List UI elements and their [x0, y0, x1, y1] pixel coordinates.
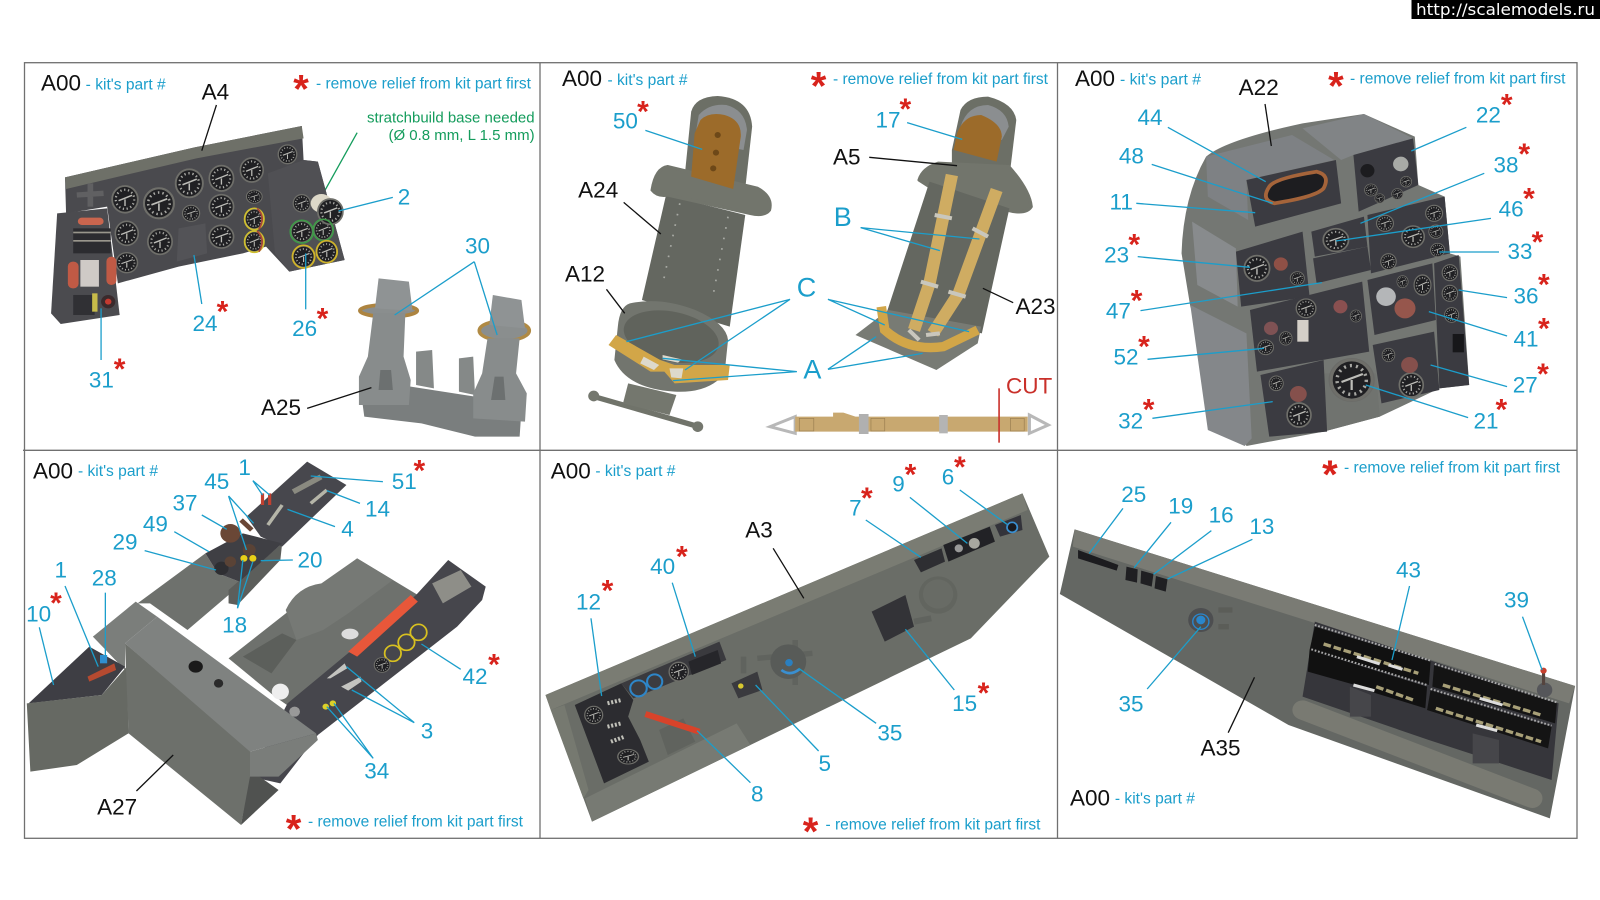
callout: A35: [1200, 677, 1254, 761]
heading: kit's part legend: A00: [1075, 66, 1115, 91]
callout: A: A: [803, 354, 821, 384]
heading: kit's part legend: [551, 458, 676, 483]
legend: remove relief note: [811, 65, 1049, 109]
callout: 34: [327, 703, 389, 784]
callout: 31: 31: [89, 367, 114, 392]
callout: 1 top: 1: [238, 455, 251, 480]
note: stretch build base: stratchbuild base needed: [367, 109, 535, 126]
callout: 15: *: [978, 677, 990, 710]
callout: 52: *: [1138, 330, 1150, 363]
callout: B: [834, 202, 979, 251]
callout: 13: 13: [1249, 514, 1274, 539]
callout: 2: 2: [398, 184, 410, 209]
callout: 29: [112, 529, 216, 570]
callout: 6: [942, 451, 1007, 524]
callout: 40: [650, 540, 695, 657]
panel: side console A3: [545, 451, 1049, 854]
heading: kit's part legend: A00: [551, 458, 591, 483]
callout: 26: [292, 253, 329, 341]
callout: 40: *: [676, 540, 688, 573]
callout: 16: 16: [1209, 503, 1234, 528]
legend: remove relief note: [286, 807, 524, 851]
callout: A3: [745, 518, 804, 598]
heading: kit's part legend: [1070, 786, 1195, 811]
callout: 18: 18: [222, 613, 247, 638]
callout: 10: [26, 587, 62, 685]
callout: A22: [1239, 75, 1279, 146]
note: stretch build base: (Ø 0.8 mm, L 1.5 mm): [388, 127, 535, 144]
callout: 33: [1439, 226, 1544, 264]
callout: 3: 3: [421, 718, 433, 743]
callout: 11: [1110, 189, 1255, 214]
callout: 42: *: [488, 649, 500, 682]
callout: 4: 4: [341, 517, 354, 542]
callout: 22: *: [1501, 89, 1513, 122]
illustration: instrument panel: [51, 126, 345, 324]
callout: 6: 6: [942, 464, 954, 489]
callout: 32: *: [1143, 394, 1155, 427]
callout: 13: [1168, 514, 1274, 579]
callout: 35: 35: [1118, 692, 1144, 717]
callout: 19: 19: [1168, 494, 1193, 519]
callout: 6: *: [954, 451, 966, 484]
heading: kit's part legend: A00: [562, 66, 602, 91]
panel: instrument panel A4 and grips A25: [41, 68, 535, 437]
callout: A25: [261, 388, 371, 420]
callout: 51: *: [413, 454, 425, 487]
legend: remove relief note: *: [811, 65, 827, 109]
callout: 25: 25: [1121, 482, 1146, 507]
callout: 34: 34: [364, 759, 389, 784]
heading: kit's part legend: - kit's part #: [86, 76, 166, 93]
callout: A5: A5: [833, 144, 861, 169]
callout: 19: [1134, 494, 1193, 568]
callout: 52: 52: [1113, 344, 1139, 369]
callout: 18: [222, 560, 253, 638]
callout: 50: [613, 95, 702, 149]
callout: 8: [697, 731, 764, 807]
callout: 36: *: [1538, 269, 1550, 302]
callout: 26: 26: [292, 316, 317, 341]
legend: remove relief note: - remove relief from kit part first: [833, 71, 1049, 88]
legend: remove relief note: [1328, 65, 1566, 109]
callout: 28: [92, 566, 117, 657]
callout: 15: [905, 629, 990, 716]
callout: 48: [1119, 143, 1273, 203]
callout: 17: [875, 93, 962, 139]
callout: 51: 51: [392, 469, 417, 494]
callout: A4: A4: [202, 79, 229, 104]
panel: side console A35: [1060, 453, 1575, 818]
callout: 41: [1429, 312, 1550, 352]
heading: kit's part legend: A00: [41, 71, 81, 96]
callout: 52: [1113, 330, 1264, 369]
callout: 36: 36: [1513, 283, 1539, 308]
heading: kit's part legend: - kit's part #: [78, 463, 158, 480]
illustration: console: [1182, 114, 1469, 446]
callout: 9: *: [905, 459, 917, 492]
callout: 7: [849, 482, 921, 557]
callout: 32: 32: [1118, 408, 1143, 433]
heading: kit's part legend: [33, 458, 158, 483]
callout: 10: 10: [26, 602, 51, 627]
callout: 15: 15: [952, 691, 977, 716]
callout: 23: *: [1128, 229, 1140, 262]
heading: kit's part legend: [1075, 66, 1201, 91]
callout: 7: 7: [849, 496, 862, 521]
callout: A3: A3: [745, 518, 773, 543]
illustration: strap with cut line: [770, 413, 1048, 434]
callout: 12: 12: [576, 589, 601, 614]
illustration: cockpit tub: [27, 462, 486, 825]
callout: 47: 47: [1106, 298, 1131, 323]
legend: remove relief note: - remove relief from kit part first: [1350, 70, 1566, 87]
callout: 50: *: [637, 95, 649, 128]
callout: 29: 29: [112, 529, 138, 554]
callout: 49: 49: [143, 512, 168, 537]
callout: 21: 21: [1473, 408, 1499, 433]
callout: 12: [576, 575, 614, 696]
heading: kit's part legend: A00: [1070, 786, 1110, 811]
callout: 8: 8: [751, 782, 764, 807]
callout: 22: [1411, 89, 1513, 151]
illustration: left seat: [588, 96, 770, 432]
callout: 9: 9: [892, 472, 905, 497]
callout: 42: 42: [462, 664, 488, 689]
callout: A25: A25: [261, 395, 301, 420]
illustration: side console A3: [545, 493, 1049, 822]
callout: 47: *: [1131, 284, 1143, 317]
heading: kit's part legend: - kit's part #: [1120, 71, 1201, 88]
callout: 22: 22: [1476, 103, 1501, 128]
callout: 46: *: [1523, 182, 1535, 215]
callout: 14: 14: [365, 497, 390, 522]
callout: 27: [1431, 358, 1549, 397]
callout: 41: 41: [1513, 327, 1539, 352]
callout: A24: [578, 177, 661, 234]
callout: 11: 11: [1110, 189, 1133, 214]
callout: A35: A35: [1200, 736, 1241, 761]
callout: 43: 43: [1396, 558, 1421, 583]
callout: CUT: CUT: [1006, 373, 1052, 398]
callout: 23: 23: [1104, 243, 1129, 268]
callout: 48: 48: [1119, 143, 1144, 168]
callout: A4: [202, 79, 229, 151]
callout: 38: *: [1518, 138, 1530, 171]
legend: remove relief note: *: [1328, 65, 1344, 109]
legend: remove relief note: - remove relief from kit part first: [826, 816, 1041, 833]
callout: 35: 35: [877, 721, 902, 746]
legend: remove relief note: - remove relief from kit part first: [308, 814, 524, 831]
callout: 24: 24: [192, 311, 218, 336]
callout: 30: 30: [465, 233, 490, 258]
callout: A12: A12: [565, 261, 605, 286]
callout: A22: A22: [1239, 75, 1279, 100]
callout: 40: 40: [650, 554, 675, 579]
legend: remove relief note: *: [286, 807, 302, 851]
panel: centre console A22: [1075, 65, 1566, 446]
callout: 45: [204, 469, 254, 550]
callout: 44: [1137, 105, 1266, 182]
callout: 37: [172, 491, 227, 529]
legend: remove relief note: - remove relief from kit part first: [316, 75, 532, 92]
callout: 16: [1153, 503, 1234, 574]
legend: remove relief note: *: [1322, 453, 1338, 497]
callout: 35: [1118, 627, 1201, 717]
callout: A12: [565, 261, 625, 313]
callout: 3: [346, 667, 433, 743]
callout: 1 left: [54, 557, 98, 667]
callout: 49: [143, 512, 209, 552]
callout: 50: 50: [613, 109, 638, 134]
callout: A23: A23: [1015, 294, 1056, 319]
callout: 7: *: [861, 482, 873, 515]
callout: A: [663, 337, 923, 384]
callout: 28: 28: [92, 566, 117, 591]
callout: A5: [833, 144, 957, 169]
callout: CUT: [999, 373, 1052, 443]
callout: 33: 33: [1507, 239, 1533, 264]
legend: remove relief note: *: [293, 68, 309, 112]
callout: 24: *: [217, 296, 229, 329]
callout: A27: [97, 755, 173, 819]
callout: 36: [1459, 269, 1550, 308]
illustration: grips A25: [359, 278, 529, 437]
callout: 1 top: [238, 455, 270, 495]
heading: kit's part legend: A00: [33, 458, 73, 483]
legend: remove relief note: *: [803, 810, 819, 854]
callout: 39: 39: [1504, 587, 1529, 612]
illustration: side console A35: [1060, 529, 1575, 818]
callout: 47: [1106, 283, 1322, 323]
callout: 2: [339, 184, 410, 211]
callout: 42: [421, 644, 500, 689]
callout: 5: [756, 685, 831, 776]
callout: 30: [395, 233, 497, 335]
callout: 35: [799, 668, 902, 746]
legend: remove relief note: - remove relief from kit part first: [1344, 459, 1561, 476]
callout: 27: 27: [1513, 372, 1538, 397]
callout: 38: 38: [1493, 152, 1519, 177]
heading: kit's part legend: [562, 66, 688, 91]
panel: cockpit tub A27: [26, 454, 524, 851]
callout: 45: 45: [204, 469, 229, 494]
legend: remove relief note: [1322, 453, 1561, 497]
callout: A24: A24: [578, 177, 618, 202]
callout: 5: 5: [819, 751, 831, 776]
heading: kit's part legend: - kit's part #: [595, 463, 676, 480]
callout: 37: 37: [172, 491, 198, 516]
callout: 1 left: 1: [54, 557, 67, 582]
callout: B: B: [834, 202, 852, 232]
callout: C: [626, 273, 969, 370]
callout: 12: *: [602, 575, 614, 608]
callout: 44: 44: [1137, 105, 1163, 130]
callout: 43: [1392, 558, 1421, 660]
callout: 25: [1089, 482, 1146, 553]
callout: 46: [1336, 182, 1535, 241]
legend: remove relief note: [803, 810, 1041, 854]
callout: 14: [327, 491, 390, 522]
callout: A27: A27: [97, 794, 137, 819]
heading: kit's part legend: [41, 71, 166, 96]
callout: 20: [261, 547, 323, 572]
callout: 41: *: [1538, 313, 1550, 346]
callout: 24: [192, 255, 229, 336]
illustration: right seat with harness: [855, 97, 1031, 370]
callout: A23: [983, 288, 1056, 319]
callout: 51: [311, 454, 425, 494]
callout: 23: [1104, 229, 1250, 268]
callout: 4: [287, 509, 354, 542]
callout: 39: [1504, 587, 1542, 670]
callout: 20: 20: [297, 547, 323, 572]
panel: seats A24 and A23: [562, 65, 1056, 443]
callout: C: C: [797, 273, 816, 303]
watermark: site address: http://scalemodels.ru: [1416, 0, 1595, 19]
callout: 9: [892, 459, 967, 543]
callout: 17: *: [900, 93, 912, 126]
legend: remove relief note: [293, 68, 532, 112]
callout: 10: *: [50, 587, 62, 620]
callout: 46: 46: [1499, 197, 1524, 222]
callout: 26: *: [317, 302, 329, 335]
heading: kit's part legend: - kit's part #: [1115, 790, 1195, 807]
callout: 31: *: [114, 353, 126, 386]
callout: 21: *: [1496, 394, 1508, 427]
callout: 32: [1118, 394, 1273, 433]
callout: 33: *: [1532, 226, 1544, 259]
callout: 31: [89, 308, 126, 392]
callout: 38: [1360, 138, 1530, 223]
callout: 27: *: [1537, 358, 1549, 391]
note: stretch build base: [321, 109, 535, 197]
callout: 21: [1366, 385, 1508, 433]
callout: 17: 17: [875, 107, 901, 132]
heading: kit's part legend: - kit's part #: [608, 72, 688, 89]
